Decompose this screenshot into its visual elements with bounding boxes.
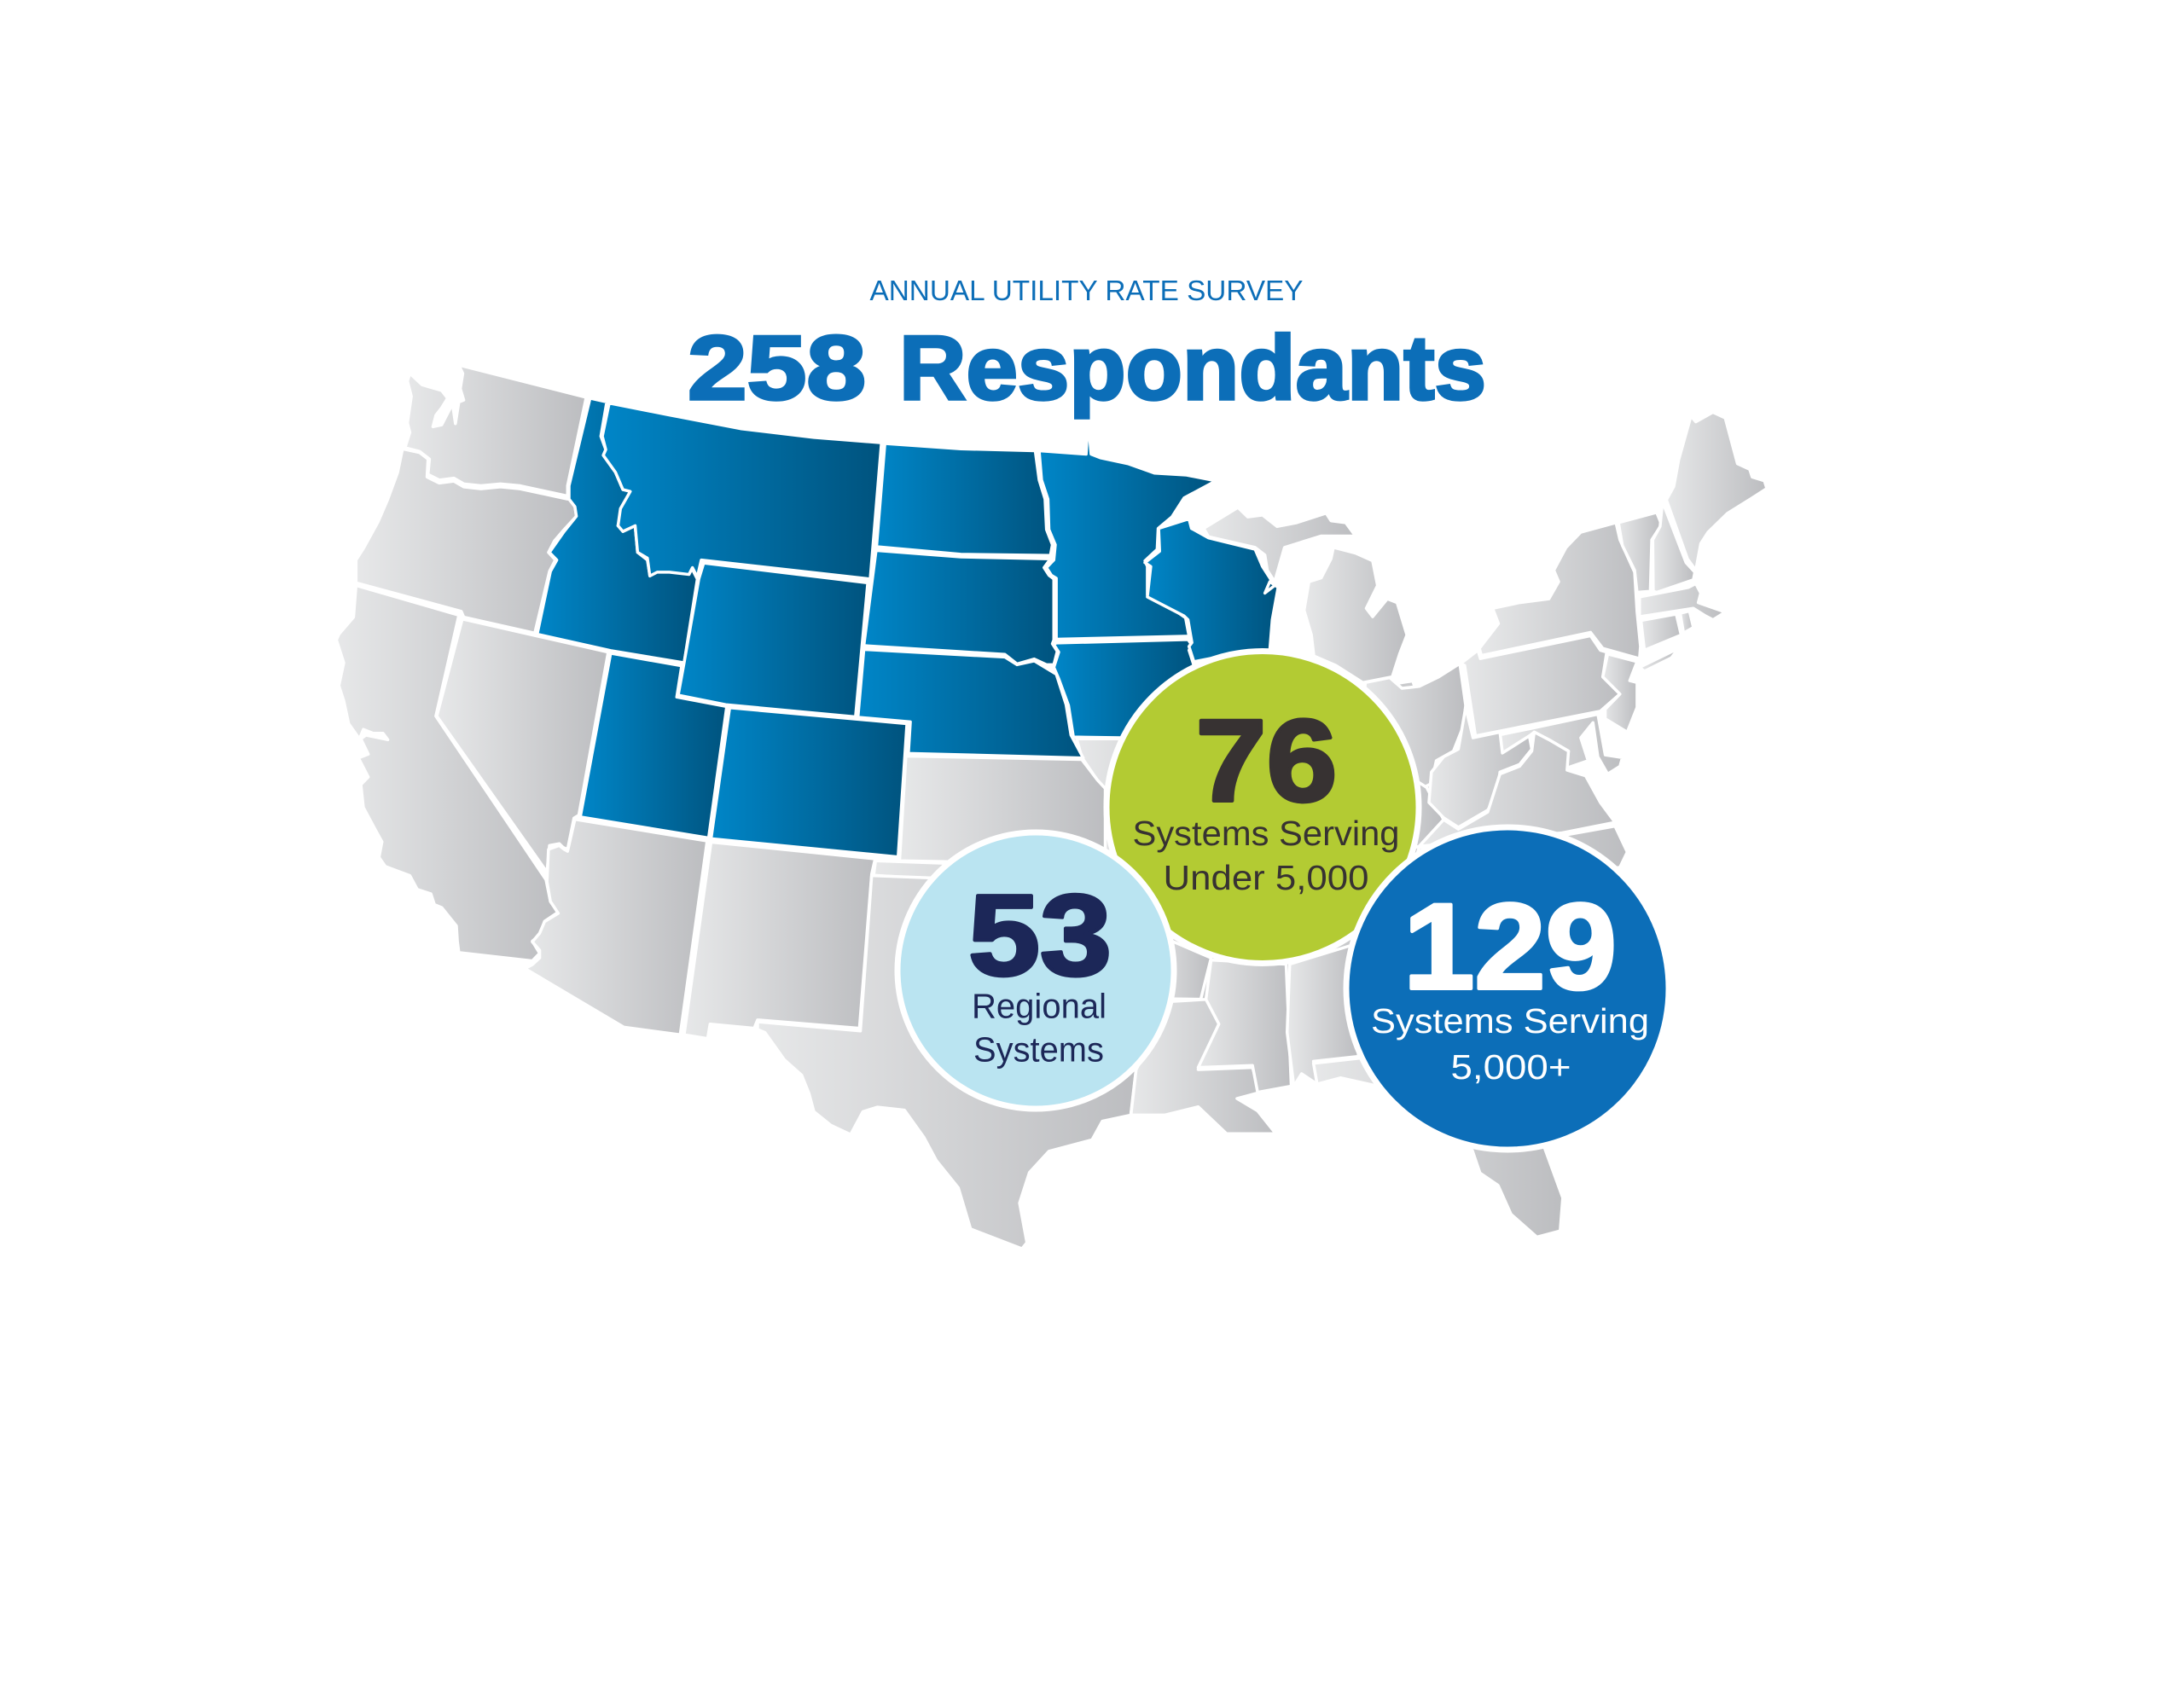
state: New Jersey bbox=[1603, 654, 1637, 732]
state: Kentucky bbox=[1361, 745, 1443, 863]
state: California bbox=[336, 586, 558, 961]
state: New Hampshire bbox=[1653, 501, 1695, 593]
state: Maine bbox=[1666, 412, 1767, 571]
callout: 76 systems serving under 5,000: Under 5,000 bbox=[1164, 858, 1368, 897]
state: Michigan lower peninsula bbox=[1304, 548, 1407, 682]
state: Louisiana bbox=[1131, 1000, 1275, 1133]
region: southern states bbox=[1131, 929, 1563, 1237]
central filler under circles bbox=[999, 681, 1516, 1094]
state: Arkansas bbox=[1144, 929, 1211, 1000]
callout: 129 systems serving 5,000+: Systems Serving bbox=[1371, 1001, 1649, 1041]
state: Ohio bbox=[1361, 664, 1466, 787]
state: Vermont bbox=[1618, 513, 1662, 593]
state: Nevada bbox=[437, 619, 608, 872]
state: Virginia bbox=[1419, 732, 1615, 846]
callout: 53 regional systems bbox=[897, 832, 1174, 1109]
state: Wisconsin bbox=[1145, 519, 1278, 662]
map: contiguous United States bbox=[336, 365, 1767, 1249]
callout: 129 systems serving 5,000+ bbox=[1346, 827, 1669, 1150]
callout: 129 systems serving 5,000+: 5,000+ bbox=[1450, 1047, 1571, 1087]
state: Wyoming bbox=[678, 563, 868, 717]
state: Kansas bbox=[899, 756, 1106, 865]
callout: 53 regional systems: 53 bbox=[968, 871, 1112, 1000]
state: Nebraska bbox=[858, 649, 1083, 758]
state: Iowa bbox=[1054, 640, 1194, 738]
callout: 76 systems serving under 5,000 bbox=[1107, 652, 1419, 964]
state: Long Island bbox=[1640, 648, 1679, 671]
state: Maryland and Delaware bbox=[1500, 714, 1623, 774]
region: eastern states bbox=[1039, 412, 1767, 878]
state: Pennsylvania bbox=[1461, 635, 1620, 736]
state: West Virginia bbox=[1429, 707, 1531, 827]
callout: 76 systems serving under 5,000: Systems Serving bbox=[1133, 814, 1399, 853]
state: Rhode Island bbox=[1680, 611, 1693, 633]
callout: 76 systems serving under 5,000: 76 bbox=[1196, 696, 1338, 826]
state: Arizona bbox=[525, 820, 707, 1035]
state: Utah bbox=[580, 653, 727, 838]
state: Florida bbox=[1314, 1058, 1563, 1237]
state: South Dakota bbox=[864, 550, 1057, 664]
callout: 53 regional systems: Regional bbox=[972, 986, 1107, 1025]
hidden central states bbox=[999, 681, 1516, 1094]
state: Washington bbox=[405, 365, 586, 496]
state: Connecticut bbox=[1641, 614, 1682, 650]
state: Michigan upper peninsula bbox=[1204, 507, 1356, 582]
state: Idaho bbox=[537, 398, 697, 663]
state: Minnesota bbox=[1039, 437, 1216, 639]
state: North Carolina bbox=[1409, 826, 1627, 878]
state: Mississippi bbox=[1198, 960, 1292, 1093]
state: Texas bbox=[758, 876, 1137, 1249]
state: New York bbox=[1479, 523, 1641, 658]
heading: survey name: ANNUAL UTILITY RATE SURVEY bbox=[870, 275, 1304, 306]
state: Massachusetts bbox=[1640, 583, 1725, 620]
callout: 129 systems serving 5,000+: 129 bbox=[1403, 879, 1617, 1015]
title: 258 Respondants: Respondants bbox=[899, 316, 1486, 419]
state: Montana bbox=[602, 403, 881, 579]
state: Oklahoma bbox=[874, 861, 1137, 930]
callout: 53 regional systems: Systems bbox=[973, 1030, 1104, 1070]
state: Oregon bbox=[356, 449, 577, 633]
state: New Mexico bbox=[684, 842, 875, 1039]
state: Missouri bbox=[1077, 739, 1258, 929]
state: Alabama bbox=[1287, 946, 1358, 1086]
title: 258 Respondants: 258 bbox=[688, 316, 866, 419]
state: North Dakota bbox=[876, 443, 1053, 555]
state: Colorado bbox=[711, 708, 907, 857]
